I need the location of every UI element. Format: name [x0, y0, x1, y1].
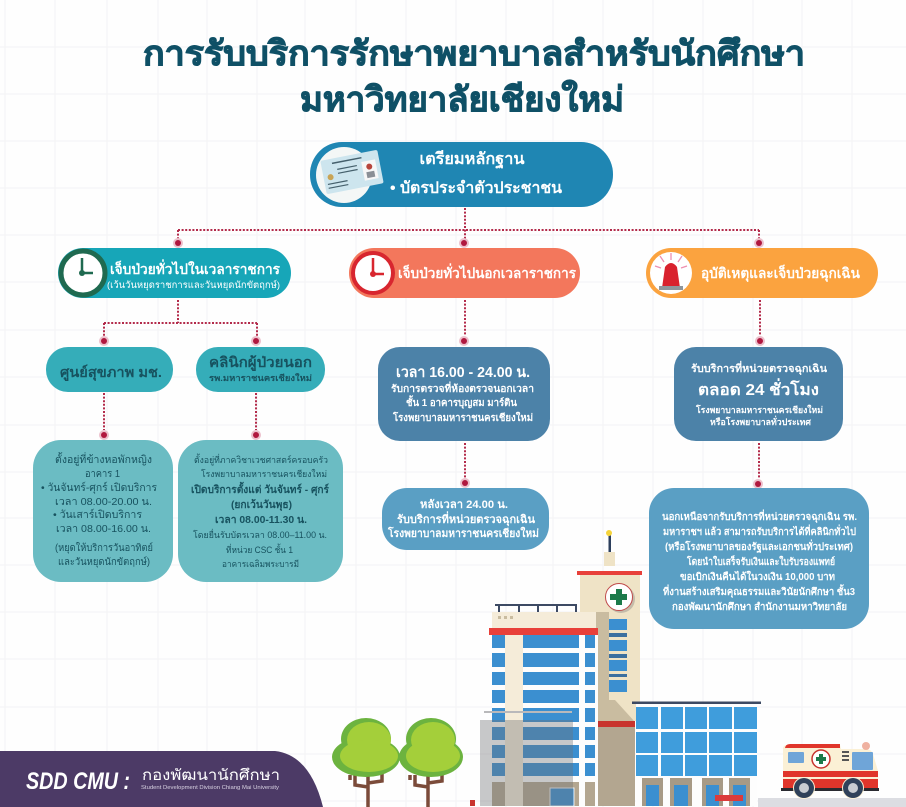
- panel: accidents and emergencies: [646, 248, 878, 298]
- panel: reimbursement details: โดยนำใบเสร็จรับเงินและใบรับรองแพทย์: [686, 554, 835, 568]
- panel: emergency 24 hours: [674, 347, 843, 441]
- panel: 16.00-24.00 service: ชั้น 1 อาคารบุญสม มาร์ติน: [406, 395, 517, 409]
- icon: green clock: [61, 251, 105, 295]
- panel: after 24.00 service: [382, 488, 549, 550]
- panel: health centre details: อาคาร 1: [85, 468, 120, 480]
- footer banner: SDD CMU :: [26, 768, 130, 795]
- panel: clinic details: ที่หน่วย CSC ชั้น 1: [226, 543, 293, 555]
- panel: clinic details: อาคารเฉลิมพระบารมี: [222, 559, 299, 569]
- panel: general illness after hours: เจ็บป่วยทั่วไปนอกเวลาราชการ: [398, 263, 576, 281]
- panel: after 24.00 service: หลังเวลา 24.00 น.: [420, 498, 508, 511]
- panel: clinic details: [178, 440, 343, 582]
- panel: emergency 24 hours: ตลอด 24 ชั่วโมง: [698, 378, 819, 399]
- panel: 16.00-24.00 service: [378, 347, 550, 441]
- panel: emergency 24 hours: หรือโรงพยาบาลทั่วประเทศ: [710, 415, 811, 427]
- panel: reimbursement details: (หรือโรงพยาบาลของรัฐและเอกชนทั่วประเทศ): [665, 539, 853, 553]
- icon: hospital illustration: [480, 530, 761, 806]
- panel: clinic details: เปิดบริการตั้งแต่ วันจันทร์ - ศุกร์: [191, 481, 329, 497]
- icon: ambulance: [781, 742, 879, 799]
- panel: reimbursement details: มหาราชฯ แล้ว สามารถรับบริการได้ที่คลินิกทั่วไป: [663, 524, 856, 538]
- panel: general illness after hours: [349, 248, 580, 298]
- icon: emergency beacon: [650, 252, 692, 294]
- panel: general illness during office hours: [58, 248, 291, 298]
- panel: outpatient clinic: [196, 347, 325, 392]
- panel: prepare documents: • บัตรประจำตัวประชาชน: [390, 179, 562, 197]
- panel: reimbursement details: กองพัฒนานักศึกษา สำนักงานมหาวิทยาลัย: [672, 601, 847, 613]
- ground strip: [758, 798, 906, 807]
- connector lines: [99, 208, 765, 489]
- panel: health centre details: • วันเสาร์เปิดบริการ: [53, 508, 142, 521]
- footer banner: Student Development Division Chiang Mai University: [141, 785, 279, 791]
- footer banner: กองพัฒนานักศึกษา: [142, 767, 280, 784]
- panel: 16.00-24.00 service: รับการตรวจที่ห้องตรวจนอกเวลา: [391, 381, 534, 395]
- panel: health centre details: เวลา 08.00-16.00 น.: [56, 523, 151, 535]
- panel: prepare documents: เตรียมหลักฐาน: [420, 149, 525, 169]
- icon: trees: [332, 718, 463, 807]
- panel: prepare documents: [310, 142, 613, 207]
- panel: clinic details: เวลา 08.00-11.30 น.: [215, 514, 307, 526]
- panel: reimbursement details: ขอเบิกเงินคืนได้ในวงเงิน 10,000 บาท: [680, 570, 835, 583]
- tower: [577, 530, 642, 806]
- panel: health centre details: • วันจันทร์-ศุกร์ เปิดบริการ: [41, 481, 157, 494]
- panel: clinic details: โรงพยาบาลมหาราชนครเชียงใหม่: [201, 469, 327, 479]
- panel: emergency 24 hours: โรงพยาบาลมหาราชนครเชียงใหม่: [695, 404, 823, 415]
- panel: reimbursement details: ที่งานสร้างเสริมคุณธรรมและวินัยนักศึกษา ชั้น3: [663, 584, 855, 598]
- title: มหาวิทยาลัยเชียงใหม่: [300, 79, 624, 119]
- panel: student health centre: [46, 347, 173, 392]
- panel: health centre details: (หยุดให้บริการวันอาทิตย์: [55, 542, 153, 554]
- panel: outpatient clinic: คลินิกผู้ป่วยนอก: [209, 354, 312, 371]
- icon: ID card: [316, 147, 384, 203]
- panel: general illness during office hours: เจ็บป่วยทั่วไปในเวลาราชการ: [110, 259, 280, 277]
- panel: student health centre: ศูนย์สุขภาพ มช.: [60, 364, 162, 381]
- icon: small red plants: [470, 800, 541, 806]
- icon: red clock: [353, 253, 393, 293]
- title: การรับบริการรักษาพยาบาลสำหรับนักศึกษา: [143, 35, 805, 73]
- side building: [632, 702, 761, 806]
- panel: general illness during office hours: (เว้นวันหยุดราชการและวันหยุดนักขัตฤกษ์): [107, 279, 280, 291]
- panel: clinic details: ตั้งอยู่ที่ภาควิชาเวชศาสตร์ครอบครัว: [194, 453, 328, 466]
- panel: health centre details: และวันหยุดนักขัตฤกษ์): [58, 556, 150, 568]
- panel: after 24.00 service: รับบริการที่หน่วยตรวจฉุกเฉิน: [397, 511, 535, 527]
- panel: reimbursement details: [649, 488, 869, 629]
- main building: [480, 605, 598, 806]
- title: [143, 35, 805, 119]
- panel: health centre details: เวลา 08.00-20.00 น.: [55, 496, 152, 508]
- panel: after 24.00 service: โรงพยาบาลมหาราชนครเชียงใหม่: [387, 526, 539, 540]
- panel: emergency 24 hours: รับบริการที่หน่วยตรวจฉุกเฉิน: [691, 360, 828, 376]
- panel: health centre details: ตั้งอยู่ที่ข้างหอพักหญิง: [55, 452, 152, 466]
- panel: clinic details: (ยกเว้นวันพุธ): [231, 498, 292, 512]
- panel: accidents and emergencies: อุบัติเหตุและเจ็บป่วยฉุกเฉิน: [701, 264, 860, 282]
- panel: clinic details: โดยยื่นรับบัตรเวลา 08.00–11.00 น.: [193, 528, 327, 540]
- panel: health centre details: [33, 440, 173, 582]
- panel: 16.00-24.00 service: เวลา 16.00 - 24.00 น.: [396, 364, 530, 381]
- footer banner: [0, 751, 323, 807]
- panel: reimbursement details: นอกเหนือจากรับบริการที่หน่วยตรวจฉุกเฉิน รพ.: [662, 509, 857, 523]
- panel: outpatient clinic: รพ.มหาราชนครเชียงใหม่: [209, 373, 312, 383]
- panel: 16.00-24.00 service: โรงพยาบาลมหาราชนครเชียงใหม่: [392, 411, 533, 424]
